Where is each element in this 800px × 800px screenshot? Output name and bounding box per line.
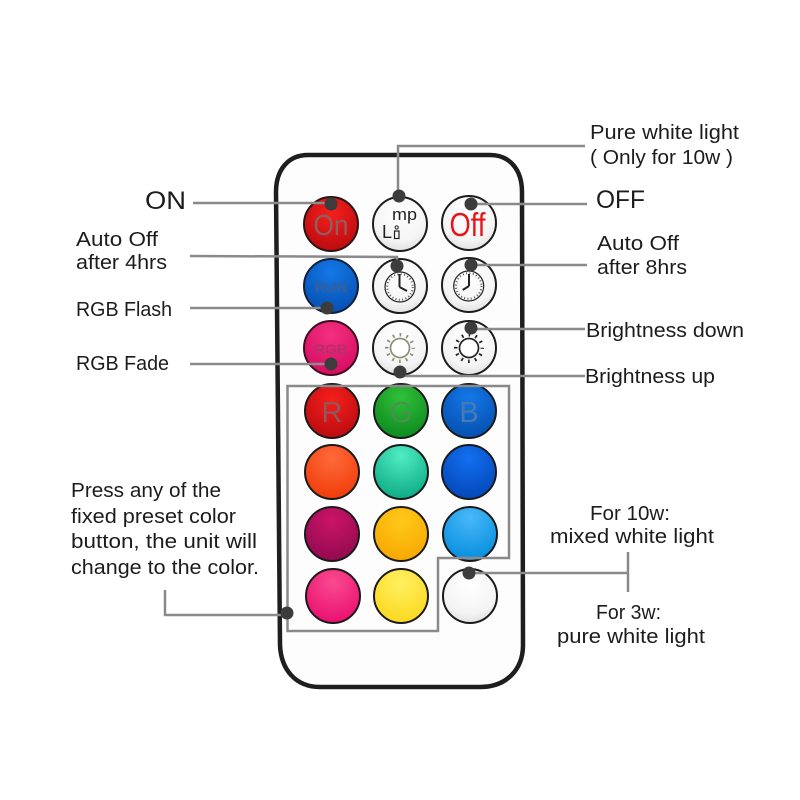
button: 8 hour timer	[442, 258, 496, 312]
button: On	[304, 197, 358, 251]
label: preset colour note	[71, 480, 259, 579]
preset colour buttons	[305, 384, 497, 623]
button: B	[442, 384, 496, 438]
label: auto off after 4hrs	[76, 229, 167, 274]
button: lamp: L	[382, 222, 392, 242]
label: auto off after 8hrs	[597, 233, 687, 279]
button: teal	[374, 445, 428, 499]
button: Off: Off	[450, 206, 486, 243]
row 3 buttons	[304, 321, 496, 375]
row 2 buttons	[304, 258, 496, 313]
label: brightness down: Brightness down	[586, 320, 744, 342]
callout lines	[165, 146, 628, 615]
label: auto off after 4hrs: after 4hrs	[76, 252, 167, 274]
label: for 3w pure white light	[557, 602, 705, 648]
label: pure white light only for 10w: Pure white light	[590, 122, 739, 144]
button: G	[374, 384, 428, 438]
label: preset colour note: button, the unit will	[71, 531, 257, 553]
label: preset colour note: Press any of the	[71, 480, 221, 502]
label: pure white light only for 10w	[590, 122, 739, 169]
label: brightness up: Brightness up	[585, 366, 715, 388]
label: for 10w mixed white light	[550, 503, 714, 548]
button: white	[443, 569, 497, 623]
label: auto off after 8hrs: after 8hrs	[597, 257, 687, 279]
button: RUN	[304, 259, 358, 313]
remote control body	[276, 155, 523, 687]
row 1 buttons	[304, 196, 496, 251]
button: amber	[374, 507, 428, 561]
bracket around preset colour buttons	[288, 386, 509, 631]
label: auto off after 8hrs: Auto Off	[597, 233, 679, 255]
button: RGB	[304, 321, 358, 375]
button: brightness down	[442, 321, 496, 375]
label: ON: ON	[145, 187, 186, 215]
button: RUN: RUN	[314, 279, 348, 295]
button: brightness up	[373, 321, 427, 375]
button: rose	[306, 569, 360, 623]
label: preset colour note: change to the color.	[71, 557, 259, 579]
button: Off	[442, 196, 496, 250]
button: R	[305, 384, 359, 438]
button: sky blue	[443, 507, 497, 561]
button: lamp: mp	[392, 205, 417, 224]
label: RGB Flash: RGB Flash	[76, 299, 172, 321]
label: for 3w pure white light: pure white light	[557, 626, 705, 648]
label: auto off after 4hrs: Auto Off	[76, 229, 158, 251]
button: G: G	[390, 397, 412, 429]
label: for 10w mixed white light: mixed white light	[550, 526, 714, 548]
button: yellow	[374, 569, 428, 623]
button: plum	[305, 507, 359, 561]
button: On: On	[314, 210, 348, 242]
label: RGB Fade: RGB Fade	[76, 353, 169, 375]
callout dots	[280, 190, 478, 620]
button: R: R	[322, 397, 342, 429]
label: for 10w mixed white light: For 10w:	[590, 503, 670, 525]
label: OFF: OFF	[596, 186, 645, 214]
button: 4 hour timer	[373, 259, 427, 313]
button: RGB: RGB	[314, 341, 348, 357]
button: B: B	[459, 397, 479, 429]
button: orange	[305, 445, 359, 499]
label: pure white light only for 10w: ( Only for 10w )	[590, 147, 733, 169]
label: preset colour note: fixed preset color	[71, 506, 236, 528]
label: for 3w pure white light: For 3w:	[596, 602, 661, 624]
button: lamp	[373, 197, 427, 251]
button: blue	[442, 445, 496, 499]
